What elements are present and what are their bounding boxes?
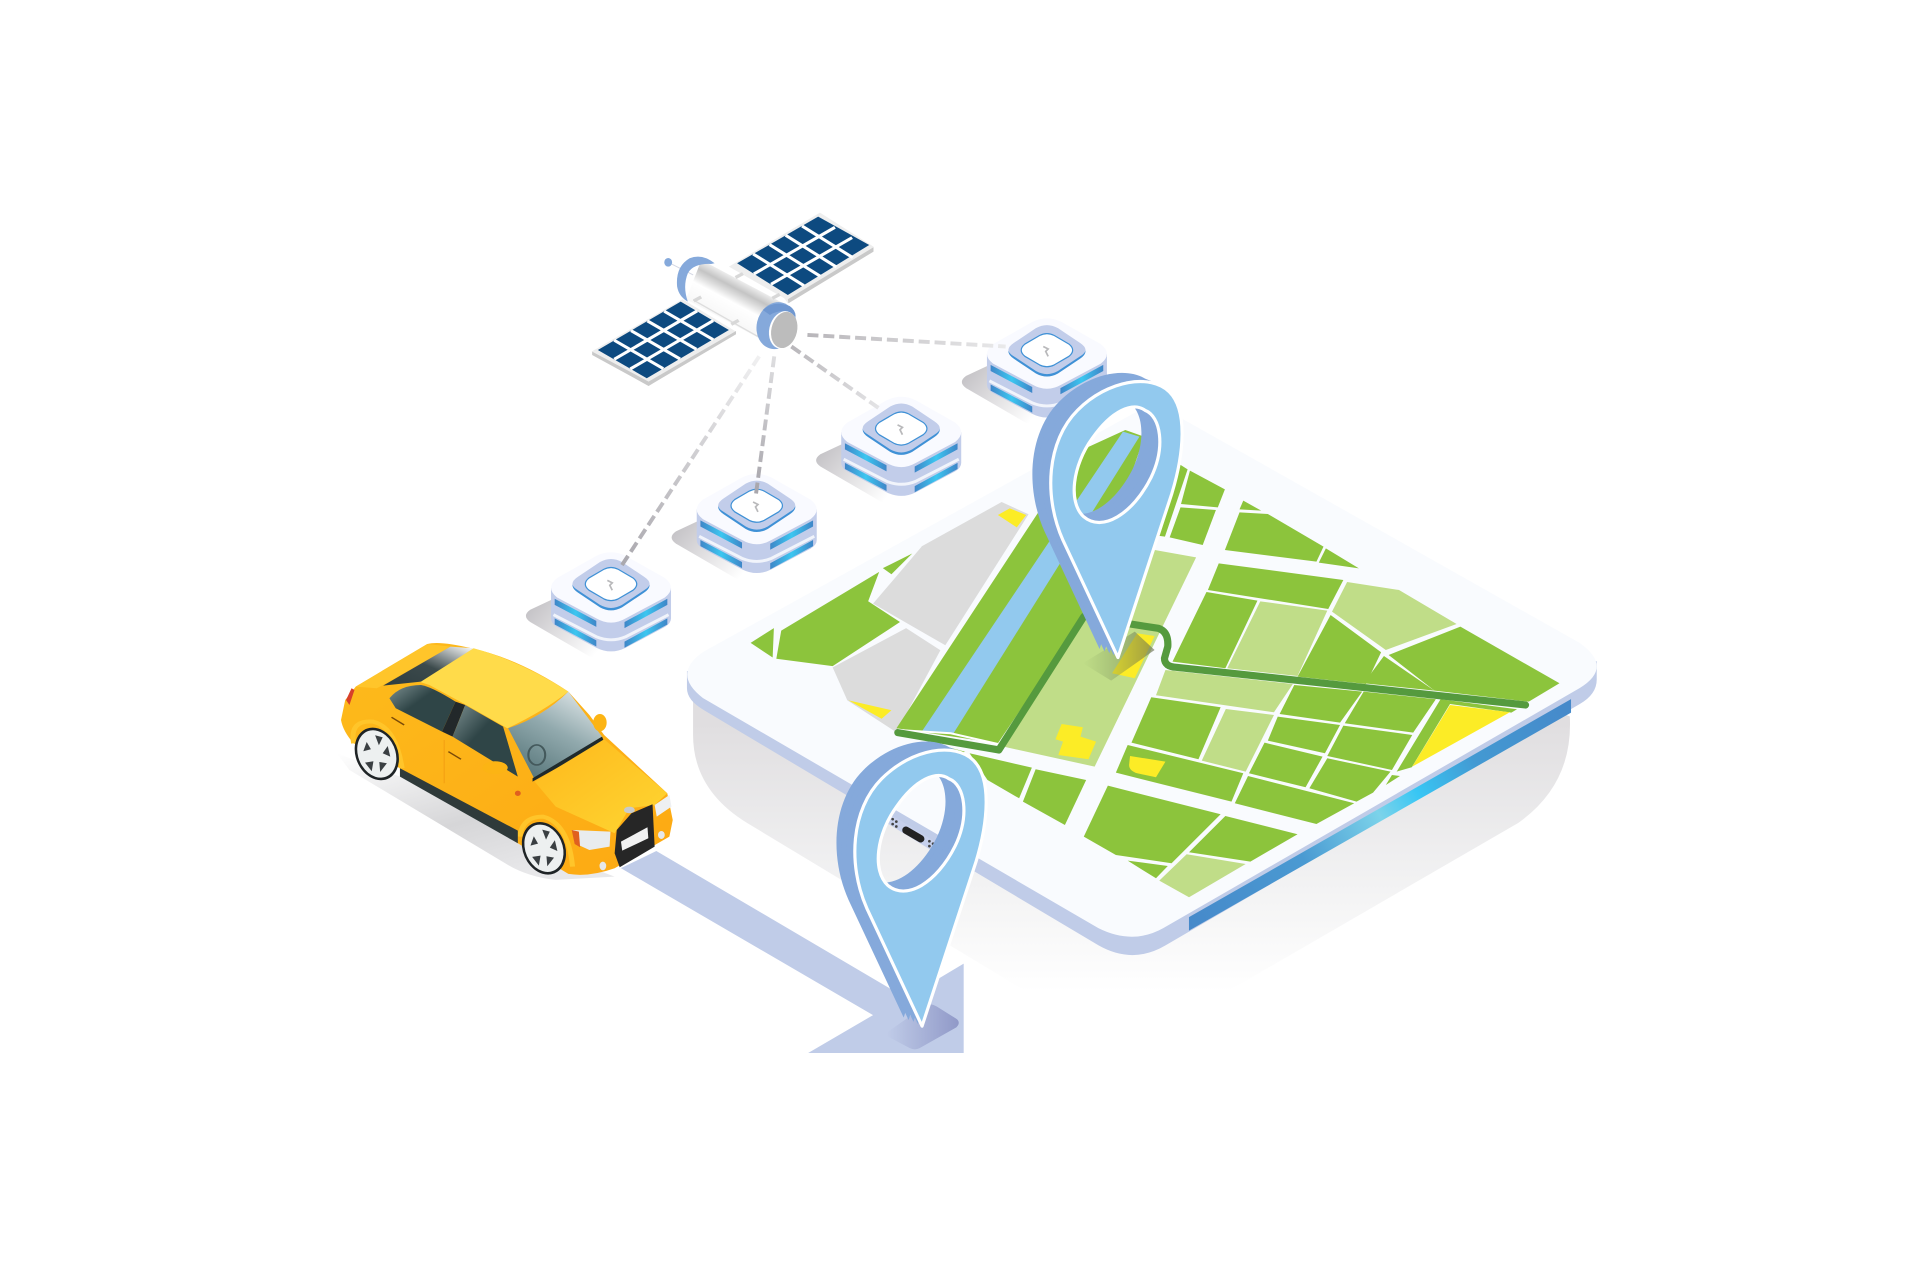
- antenna: [664, 258, 693, 275]
- ground station module 4: [962, 318, 1107, 426]
- light green blocks: [1156, 582, 1457, 897]
- satellite body: [686, 260, 789, 339]
- green blocks: [946, 463, 1559, 878]
- start map pin: [836, 742, 986, 1026]
- emblem: [624, 807, 635, 813]
- side pillar: [442, 702, 465, 737]
- pin base pad: [887, 1004, 959, 1049]
- windshield: [508, 692, 602, 779]
- side window rear: [389, 685, 456, 732]
- solar panel lower: [591, 299, 736, 386]
- car body: [341, 643, 673, 875]
- light green central block: [1004, 549, 1196, 767]
- rear deck: [356, 644, 450, 688]
- car ground shadow: [337, 753, 615, 880]
- ground station module 2: [672, 474, 817, 582]
- front ring and end cap: [752, 299, 801, 353]
- rear wheel: [349, 724, 405, 784]
- rear light: [346, 688, 354, 705]
- satellite: [591, 213, 874, 386]
- tablet screen surface: [687, 408, 1597, 937]
- yellow car: [341, 643, 673, 878]
- wiper strip: [533, 737, 604, 782]
- roof: [419, 648, 568, 728]
- white road line: [898, 730, 998, 744]
- tablet device: [687, 408, 1597, 955]
- sill: [400, 768, 518, 843]
- tablet ground shadow: [693, 588, 1570, 1036]
- yellow buildings: [998, 508, 1510, 777]
- door handles and lines: [392, 717, 461, 783]
- ground station module 3: [816, 397, 961, 505]
- rear window: [383, 647, 474, 686]
- front wheel: [516, 819, 572, 878]
- steering wheel: [528, 745, 545, 765]
- tablet side edge: [687, 661, 1597, 955]
- licence plate: [621, 827, 648, 851]
- map: left district: [751, 502, 1029, 732]
- rear ring: [677, 257, 715, 302]
- navigation route line: [898, 617, 1526, 750]
- wheel arches: [353, 722, 573, 867]
- map: city blocks: [896, 430, 1559, 897]
- destination map pin: [1032, 373, 1182, 658]
- ground station module 1: [526, 552, 671, 660]
- panel struts: [693, 272, 781, 326]
- signal lines from satellite: [620, 335, 1006, 568]
- side marker: [515, 791, 521, 796]
- park with river: [896, 430, 1144, 743]
- device port in lower pin hole: [887, 814, 940, 853]
- fog lights: [599, 862, 606, 870]
- headlights: [573, 830, 610, 850]
- grille: [615, 804, 655, 867]
- road strip from car to pin: [621, 851, 964, 1053]
- hood: [535, 739, 667, 833]
- side window front: [453, 705, 518, 777]
- wing mirrors: [593, 714, 607, 731]
- destination pin shadow: [1083, 632, 1155, 681]
- glowing blue side strip: [1189, 699, 1571, 931]
- solar panel upper: [729, 213, 874, 303]
